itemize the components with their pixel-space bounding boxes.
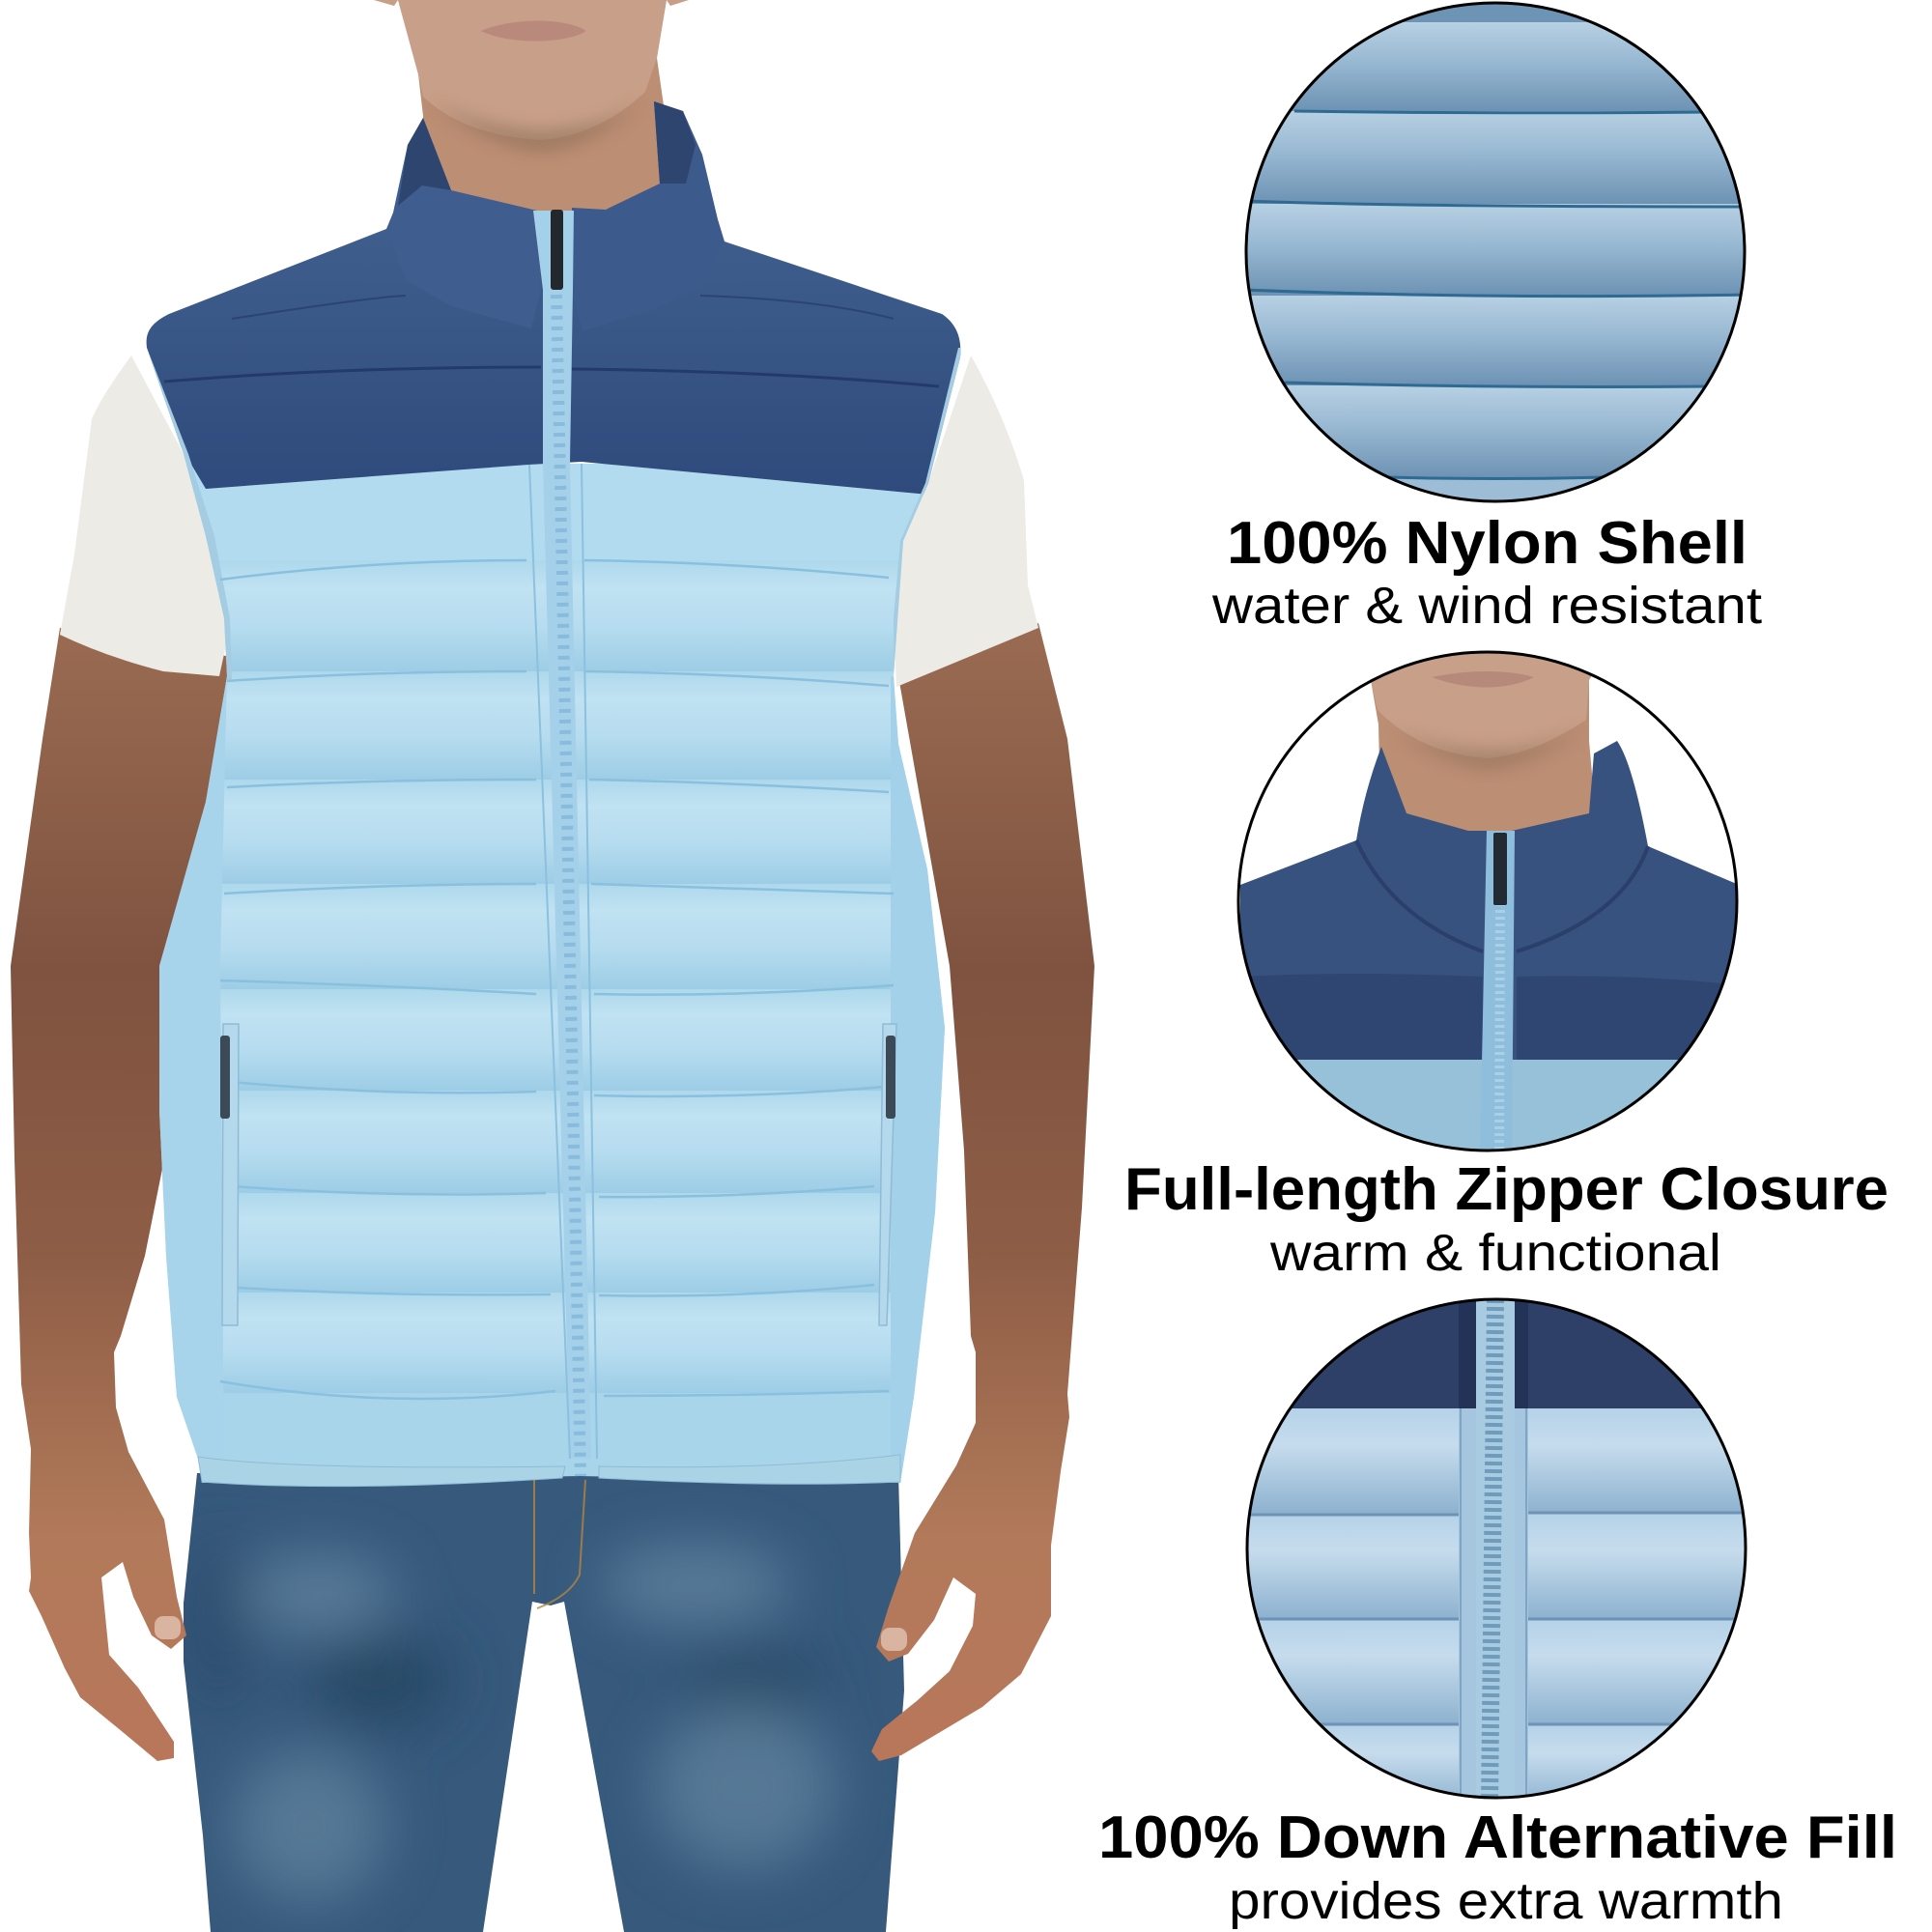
face and neck <box>374 0 689 227</box>
circle image: quilted nylon <box>1236 0 1758 507</box>
side panels <box>159 676 227 1457</box>
collar <box>386 101 724 331</box>
subheading: warm and functional: warm & functional <box>1269 1224 1721 1282</box>
heading: zipper closure: Full-length Zipper Closure <box>1124 1156 1889 1223</box>
center zipper <box>529 210 597 1476</box>
vest body <box>126 203 985 1490</box>
panel: zipper closure detail <box>1124 647 1889 1282</box>
hem trim <box>198 1455 900 1487</box>
circle image: fill close-up <box>1241 1294 1753 1806</box>
heading: nylon shell: 100% Nylon Shell <box>1227 510 1747 577</box>
circle image: collar and zipper <box>1236 647 1739 1159</box>
pocket zippers <box>220 1024 896 1325</box>
left arm and hand <box>11 628 232 1761</box>
t-shirt sleeves <box>60 355 1038 687</box>
photo: model wearing vest <box>11 0 1094 1932</box>
heading: down alternative fill: 100% Down Alternative Fill <box>1098 1804 1897 1871</box>
panel: nylon shell detail <box>1211 0 1762 635</box>
right arm and hand <box>871 623 1094 1761</box>
armhole trim <box>147 348 232 681</box>
quilting seams <box>220 560 894 1399</box>
subheading: provides extra warmth: provides extra warmth <box>1229 1872 1783 1930</box>
panel: down alternative fill detail <box>1098 1294 1897 1930</box>
jeans <box>174 1468 918 1932</box>
subheading: water and wind resistant: water & wind resistant <box>1211 577 1762 635</box>
navy yoke <box>147 229 960 495</box>
